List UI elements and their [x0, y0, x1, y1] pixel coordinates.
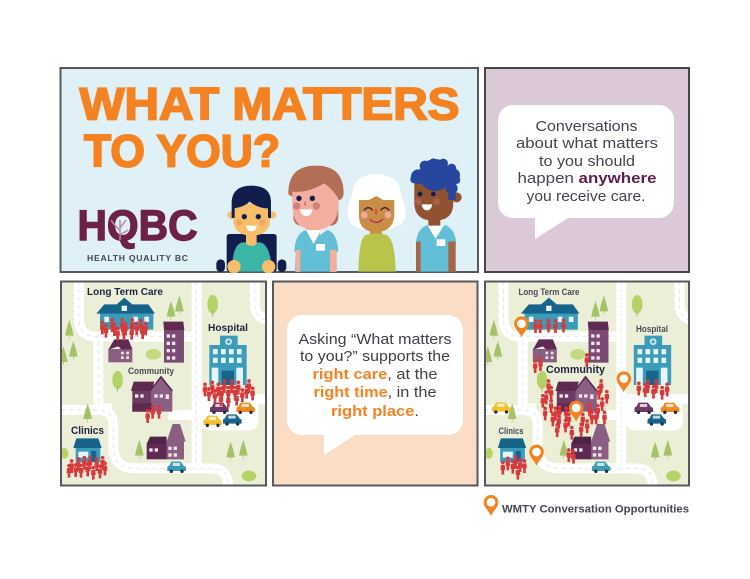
label: long term care: Long Term Care: [518, 286, 580, 297]
speech bubble: [287, 315, 463, 455]
legend: WMTY conversation opportunities: [484, 495, 689, 516]
title: TO YOU?: [84, 126, 280, 176]
text block: right care: right place .: [331, 404, 419, 420]
character: nurse with brown hair: [288, 166, 344, 272]
crowd: people across settings: [500, 318, 669, 480]
panel: map of conversation opportunities: [483, 278, 693, 488]
text block: anywhere: you receive care.: [526, 189, 646, 205]
characters: [216, 158, 462, 273]
crowd: hospital: [203, 379, 255, 408]
label: long term care: Long Term Care: [87, 287, 163, 298]
text block: right care: right time , in the: [314, 385, 436, 401]
map: people in care settings: [58, 278, 268, 488]
character: elder with white hair: [348, 174, 406, 272]
label: clinics: Clinics: [498, 425, 524, 436]
label: clinics: Clinics: [71, 425, 104, 437]
panel: map of care settings: [58, 278, 268, 488]
map: conversation opportunities: [483, 278, 693, 488]
text block: right care: [298, 332, 452, 420]
text block: anywhere: to you should: [539, 154, 635, 170]
title: [80, 78, 459, 176]
crowd: clinics: [67, 456, 107, 480]
panel: anywhere speech bubble: [485, 68, 689, 272]
text block: anywhere: about what matters: [516, 136, 658, 152]
crowd: long term care: [100, 318, 148, 340]
text block: right care: Asking “What matters: [298, 332, 452, 348]
pin: community: [569, 401, 583, 422]
character: person in wheelchair: [216, 186, 286, 273]
logo: Health Quality BC: HQBC: [78, 202, 198, 250]
text block: anywhere: [516, 119, 658, 205]
pin: long term care: [514, 316, 529, 337]
title: WHAT MATTERS: [80, 78, 459, 130]
logo: Health Quality BC: HEALTH QUALITY BC: [87, 253, 188, 263]
text block: anywhere: happen anywhere: [518, 171, 656, 187]
icon: orange pin: [484, 495, 498, 516]
text block: anywhere: Conversations: [536, 119, 638, 135]
pin: clinics: [529, 445, 544, 466]
text block: right care: to you?” supports the: [300, 349, 450, 365]
panel: right care speech bubble: [273, 282, 478, 486]
text block: right care: right care , at the: [312, 367, 438, 383]
label: community: Community: [546, 364, 606, 376]
panel: what matters to you title panel: [60, 68, 478, 273]
pin: hospital: [616, 371, 631, 392]
label: community: Community: [128, 365, 175, 376]
crowd: community: [145, 405, 161, 423]
character: nurse with blue curly hair: [410, 158, 462, 272]
label: hospital: Hospital: [208, 323, 248, 334]
legend: WMTY conversation opportunities: WMTY Conversation Opportunities: [502, 504, 689, 516]
speech bubble: [498, 105, 674, 239]
label: hospital: Hospital: [636, 323, 668, 334]
